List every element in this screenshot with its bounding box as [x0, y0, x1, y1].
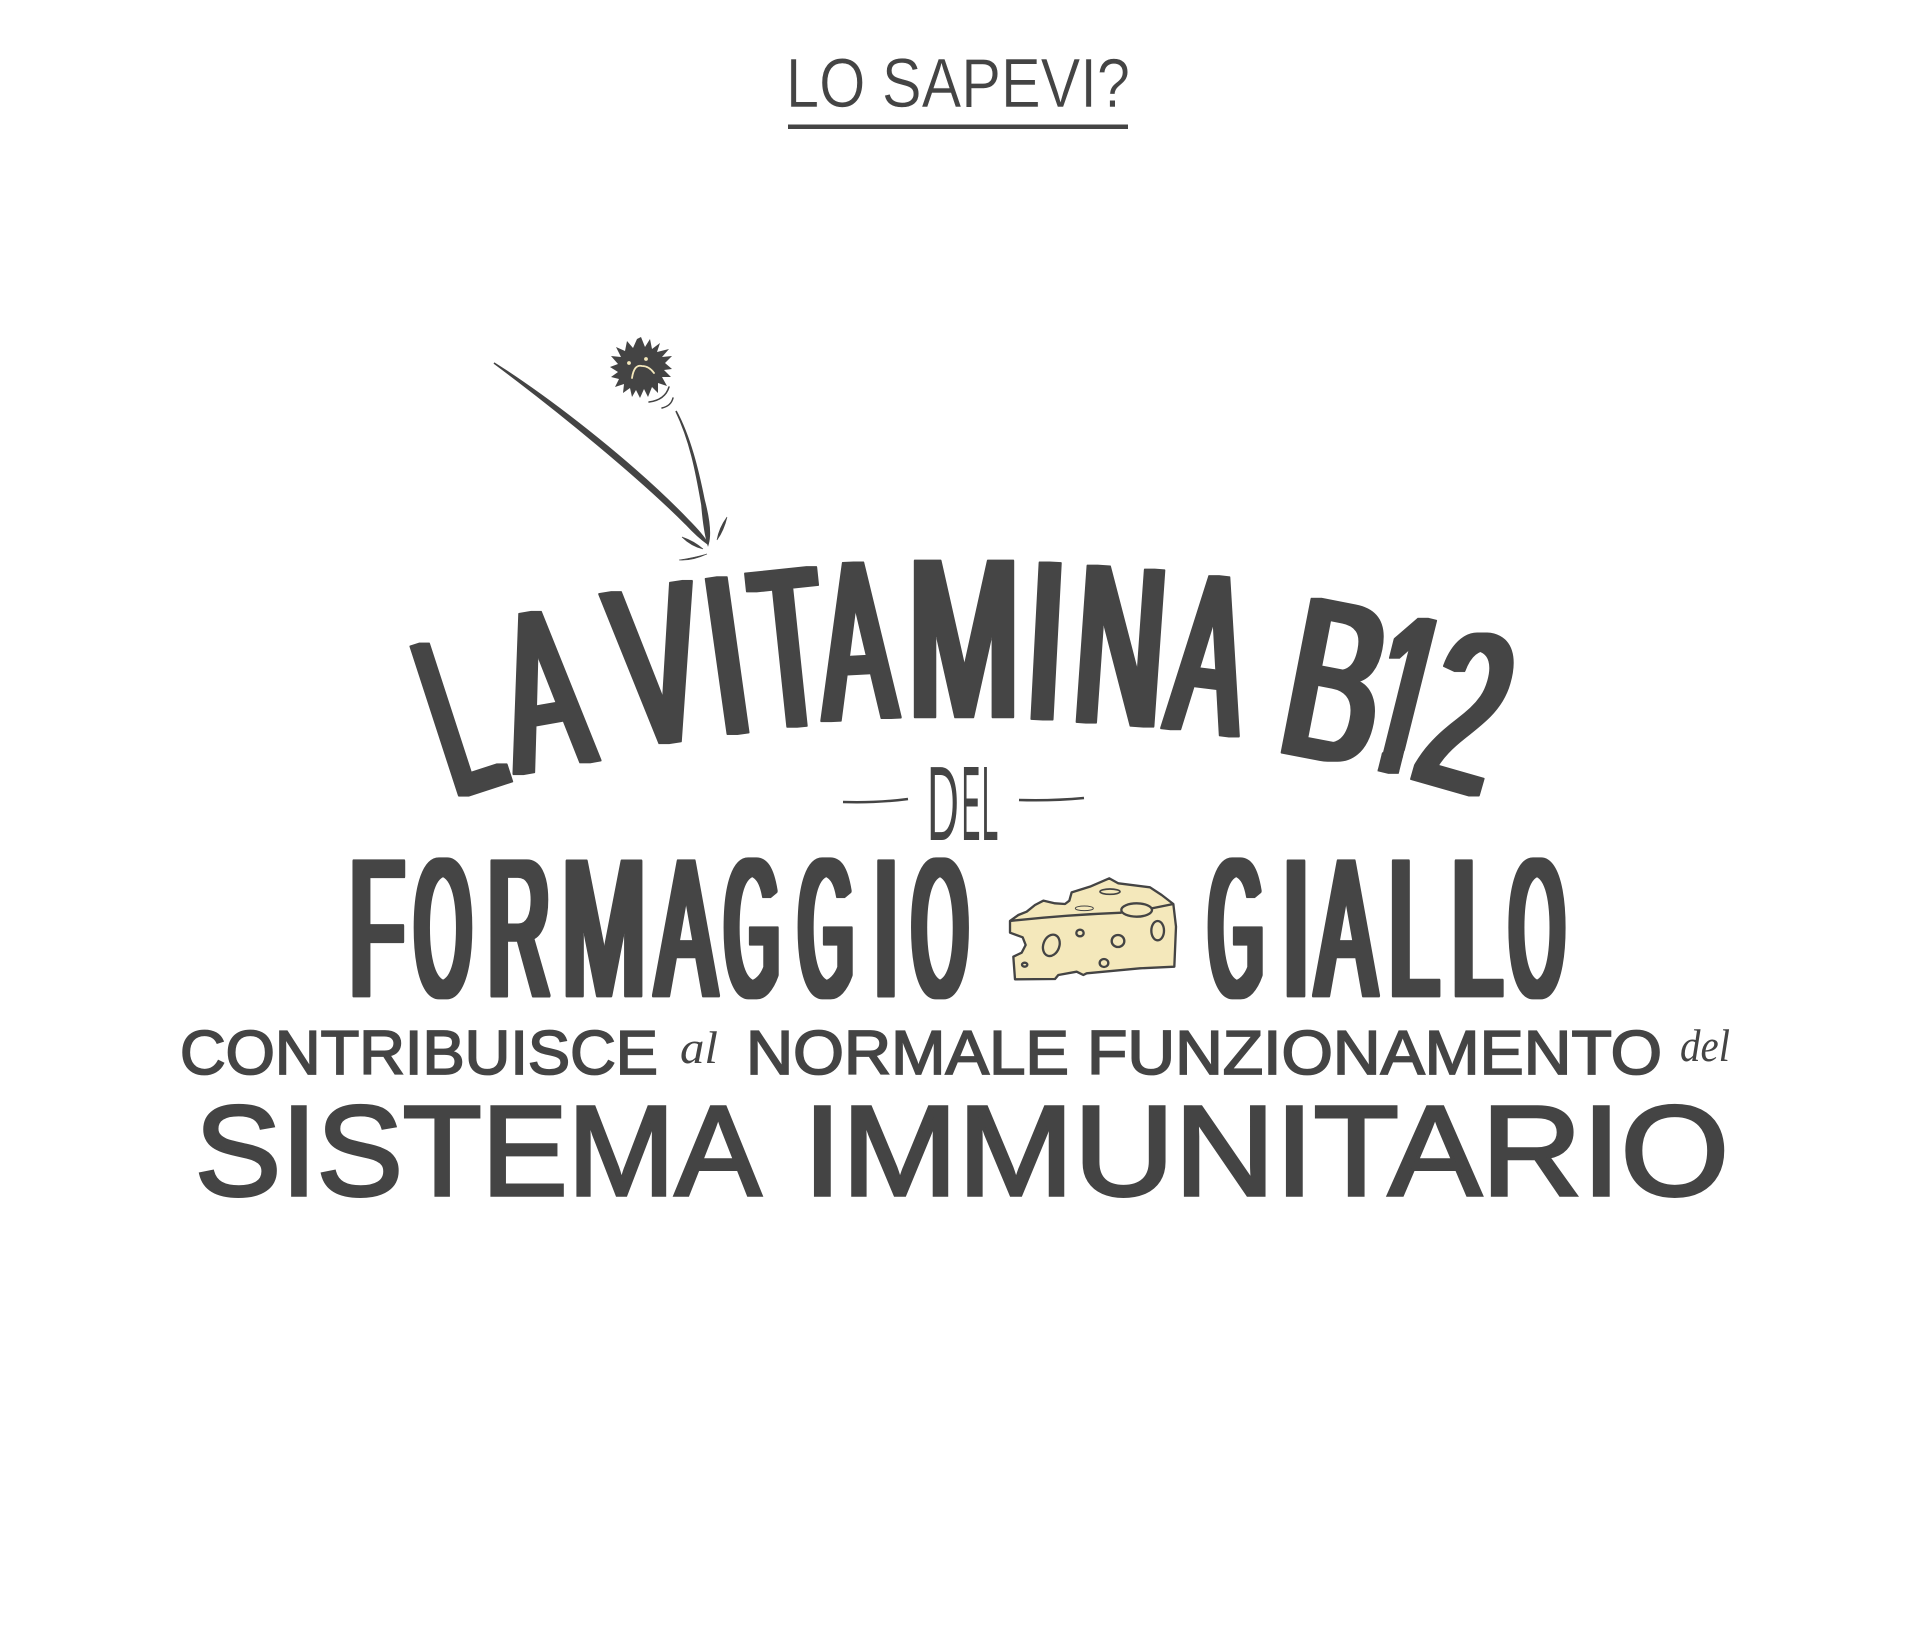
label: del with dashes: E	[962, 746, 980, 863]
word: giallo: A	[1317, 820, 1375, 1038]
label: del with dashes: L	[982, 743, 998, 863]
title: la vitamina b12 arched: A	[1160, 525, 1259, 785]
motion marks	[649, 387, 673, 408]
title: la vitamina b12 arched: M	[909, 513, 1019, 766]
word: formaggio: I	[874, 819, 898, 1037]
word: formaggio: M	[562, 819, 646, 1037]
text line: sistema immunitario	[195, 1080, 1729, 1223]
germ face	[628, 358, 654, 378]
title: la vitamina b12 arched: N	[1068, 516, 1173, 776]
title: la vitamina b12 arched: 1	[1346, 565, 1466, 825]
title: la vitamina b12 arched: T	[742, 519, 835, 778]
title: la vitamina b12 arched: 2	[1396, 581, 1537, 844]
title: la vitamina b12 arched: B	[1266, 548, 1406, 815]
text line: contribuisce al normale funzionamento del: del	[1680, 1020, 1730, 1071]
word: formaggio: F	[350, 820, 404, 1038]
text line: contribuisce al normale funzionamento del: NORMALE	[746, 1019, 1069, 1088]
arrow: short curve	[676, 411, 709, 544]
text line: sistema immunitario: SISTEMA	[195, 1080, 762, 1223]
icon: cheese wedge	[1010, 878, 1176, 979]
title: la vitamina b12 arched: A	[815, 512, 899, 769]
word: giallo: L	[1452, 821, 1502, 1038]
impact sparks	[679, 517, 727, 560]
word: formaggio	[350, 819, 968, 1038]
text line: contribuisce al normale funzionamento del: FUNZIONAMENTO	[1087, 1019, 1662, 1088]
text line: contribuisce al normale funzionamento del: al	[680, 1022, 718, 1073]
text line: sistema immunitario: IMMUNITARIO	[803, 1080, 1729, 1223]
arrow: long curve	[494, 363, 708, 544]
title: la vitamina b12 arched: L	[392, 586, 526, 844]
title: la vitamina b12 arched	[409, 560, 1514, 797]
germ body	[610, 337, 672, 398]
title: la vitamina b12 arched: A	[482, 559, 605, 822]
label: del with dashes: D	[927, 746, 959, 864]
infographic canvas	[182, 58, 1730, 1198]
title: la vitamina b12 arched: I	[1022, 513, 1070, 768]
word: giallo: L	[1390, 820, 1438, 1038]
word: formaggio: G	[725, 820, 779, 1038]
word: formaggio: O	[912, 820, 968, 1038]
title: la vitamina b12 arched: V	[596, 533, 720, 797]
text line: contribuisce al normale funzionamento del: CONTRIBUISCE	[180, 1019, 658, 1088]
label: del with dashes	[843, 743, 1084, 864]
word: formaggio: O	[415, 820, 471, 1038]
text line: contribuisce al normale funzionamento del	[180, 1019, 1730, 1088]
title: la vitamina b12 arched: I	[692, 527, 762, 783]
word: giallo: I	[1283, 819, 1309, 1037]
word: formaggio: G	[799, 820, 853, 1038]
heading: lo sapevi: LO SAPEVI?	[786, 44, 1130, 122]
word: giallo: G	[1209, 820, 1263, 1038]
word: formaggio: R	[488, 819, 550, 1037]
word: giallo: O	[1510, 820, 1564, 1038]
icon: sad germ with arrows	[494, 337, 727, 560]
word: giallo	[1209, 819, 1564, 1038]
word: formaggio: A	[657, 820, 715, 1038]
